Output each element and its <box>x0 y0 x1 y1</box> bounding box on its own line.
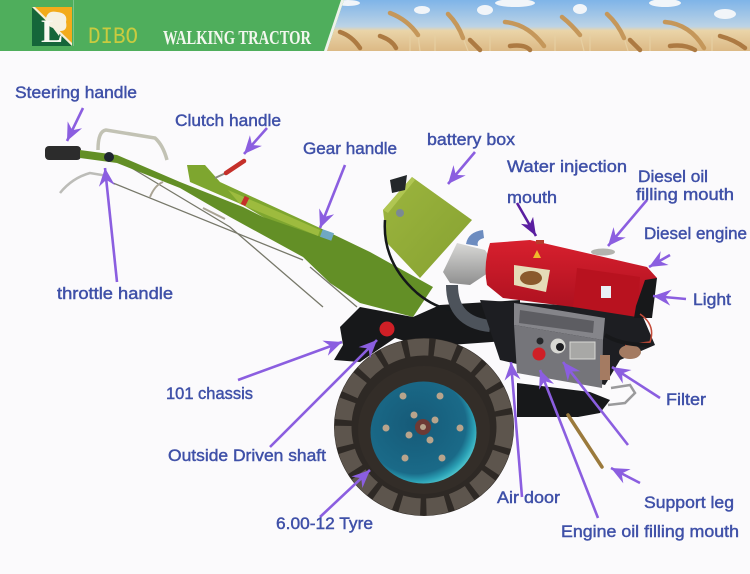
throttle lever <box>60 173 108 193</box>
tyre and wheel <box>334 338 514 516</box>
label: water injection: Water injection <box>507 157 627 176</box>
label: battery box: battery box <box>427 130 516 149</box>
arrow: light <box>653 296 686 299</box>
engine base <box>517 383 610 417</box>
arrow: control panel <box>563 362 628 445</box>
logo <box>32 0 74 50</box>
arrow: outside driven shaft <box>270 340 377 447</box>
arrow: steering handle <box>67 108 83 141</box>
label: light: Light <box>693 290 731 309</box>
clutch lever <box>215 161 244 178</box>
battery box <box>383 175 472 310</box>
label: throttle handle: throttle handle <box>57 284 173 303</box>
air filter <box>443 230 493 326</box>
black engine frame <box>480 300 655 385</box>
label: support leg: Support leg <box>644 493 734 512</box>
label: 101 chassis: 101 chassis <box>166 384 253 403</box>
control cables <box>113 167 357 307</box>
arrow: 101 chassis <box>238 342 342 380</box>
support leg <box>568 415 602 467</box>
brand name: DIBO <box>88 24 138 50</box>
arrow: support leg <box>611 468 640 483</box>
radiator panel <box>514 303 605 388</box>
main handlebar <box>80 150 433 317</box>
arrow: diesel engine <box>649 255 670 267</box>
label: mouth: mouth <box>507 188 557 207</box>
grey hoop handle <box>98 130 167 160</box>
arrow: tyre <box>320 470 370 517</box>
black chassis <box>334 300 520 362</box>
header title: WALKING TRACTOR <box>163 27 311 49</box>
label: outside driven shaft: Outside Driven shaft <box>168 446 326 465</box>
wheat field photo <box>325 0 750 51</box>
arrow: water injection mouth <box>517 203 536 236</box>
arrow: gear handle <box>320 165 345 228</box>
tension bracket <box>150 182 225 219</box>
label: filling mouth: filling mouth <box>636 185 734 204</box>
arrow: air door <box>511 362 522 497</box>
label: engine oil filling mouth: Engine oil filling mouth <box>561 522 739 541</box>
arrow: throttle handle <box>105 168 117 282</box>
arrows <box>67 108 686 518</box>
logo: L <box>41 14 63 50</box>
arrow: diesel oil filling mouth <box>608 200 647 246</box>
rear filter and hoses <box>600 314 652 405</box>
red chassis button <box>380 322 394 336</box>
steering grip <box>45 146 81 160</box>
label: air door: Air door <box>497 488 560 507</box>
header banner <box>0 0 750 51</box>
red engine hood <box>486 240 657 318</box>
walking tractor illustration <box>45 130 657 516</box>
label: diesel engine: Diesel engine <box>644 224 747 243</box>
part labels <box>15 83 747 541</box>
label: gear handle: Gear handle <box>303 139 397 158</box>
arrow: battery box <box>448 152 475 184</box>
label: diesel oil: Diesel oil <box>638 167 708 186</box>
label: steering handle: Steering handle <box>15 83 137 102</box>
arrow: filter <box>612 367 660 398</box>
label: tyre size: 6.00-12 Tyre <box>276 514 373 533</box>
arrow: engine oil filling mouth <box>540 370 598 518</box>
arrow: clutch handle <box>244 128 267 154</box>
gear lever <box>243 197 247 205</box>
label: filter: Filter <box>666 390 706 409</box>
label: clutch handle: Clutch handle <box>175 111 281 130</box>
green band <box>0 0 344 51</box>
